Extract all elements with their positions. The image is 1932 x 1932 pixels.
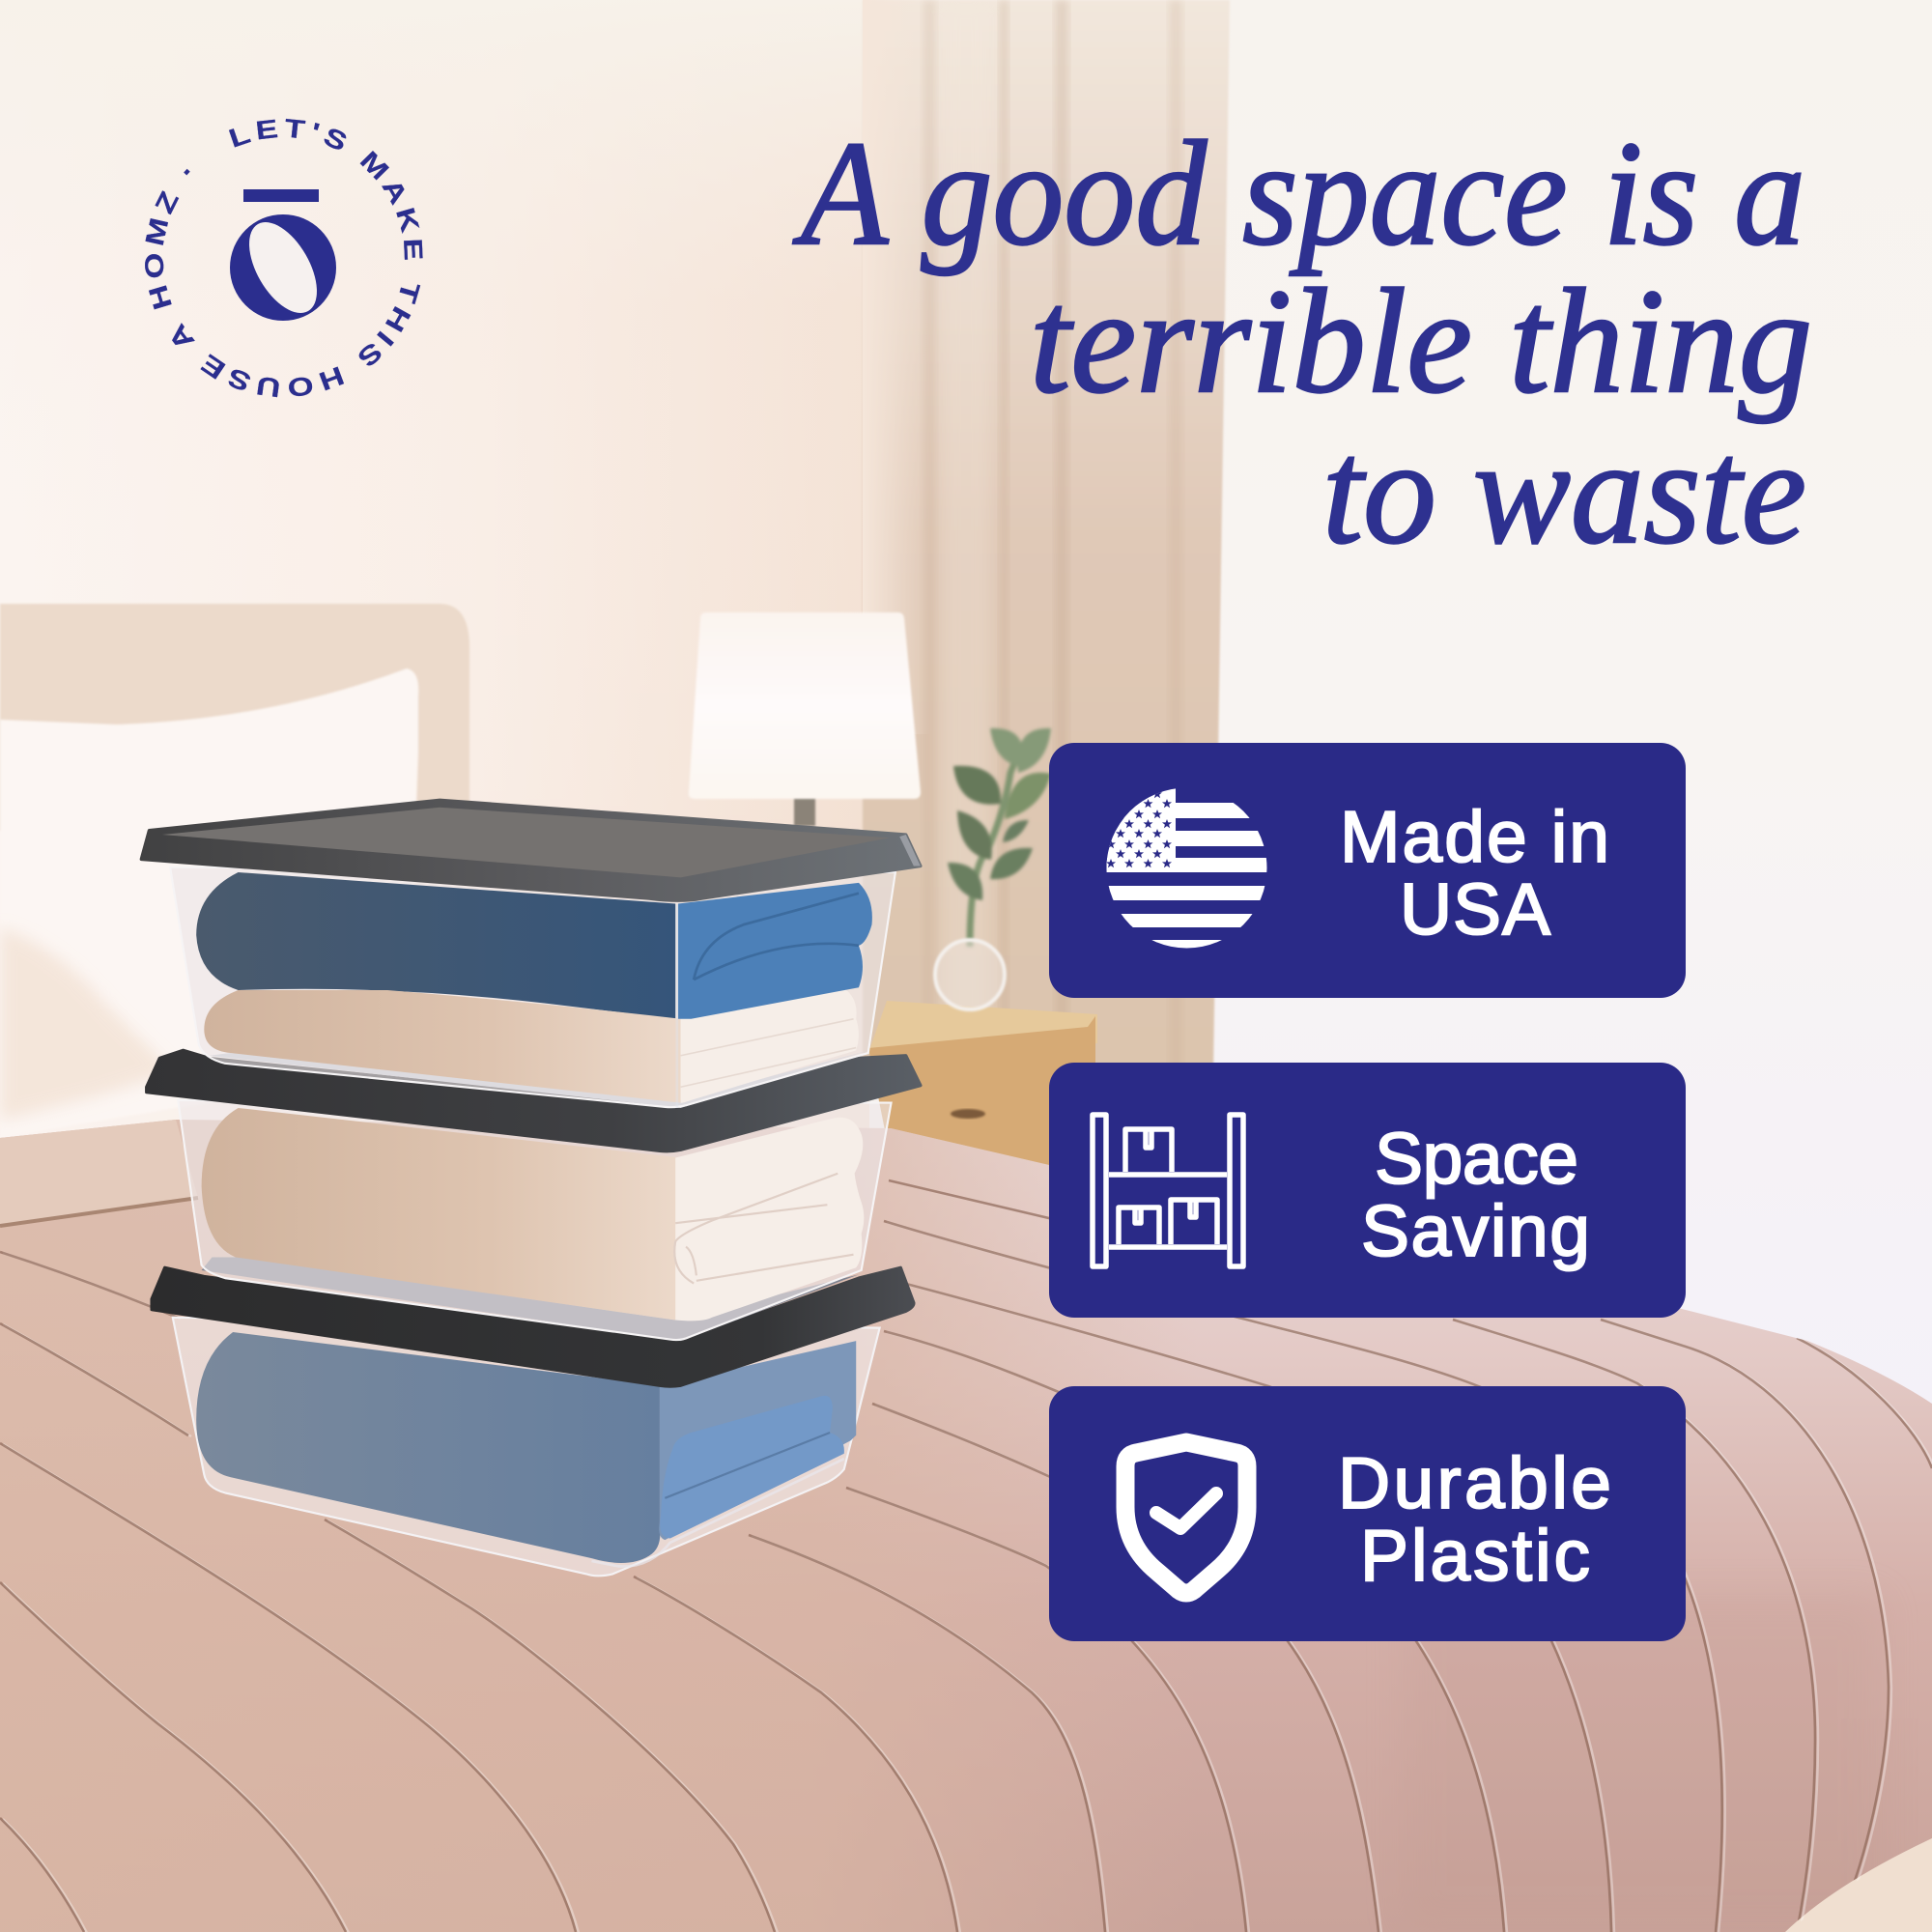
middle box lid — [147, 1050, 921, 1151]
headboard — [0, 604, 469, 831]
lid recess seen through middle box — [202, 1257, 859, 1341]
quilted bedspread — [0, 1111, 1932, 1932]
top wash over wall — [0, 0, 869, 869]
lamp — [689, 612, 921, 826]
middle box — [147, 1050, 921, 1340]
badge: space saving — [1049, 1063, 1686, 1318]
icon: shield with check — [1125, 1442, 1247, 1593]
plant in glass vase — [948, 728, 1051, 947]
stack of three storage boxes — [141, 800, 921, 1576]
circular tagline: LET'S MAKE THIS HOUSE A HOMZ · — [145, 118, 423, 398]
label: durable plastic: Durable — [1338, 1442, 1611, 1523]
label: made in USA: USA — [1400, 868, 1550, 950]
floor — [1642, 1642, 1932, 1932]
vase glass — [935, 940, 1005, 1009]
title — [792, 110, 1812, 575]
quilting seams — [0, 1180, 1932, 1932]
title: terrible thing — [1030, 258, 1812, 424]
pillow — [0, 668, 418, 1138]
label: durable plastic — [1338, 1442, 1611, 1596]
label: space saving: Space — [1375, 1118, 1578, 1199]
label: made in USA — [1340, 796, 1609, 950]
wall left of curtain — [0, 0, 869, 1208]
nightstand — [868, 1001, 1097, 1174]
label: space saving: Saving — [1361, 1190, 1590, 1271]
logo mark — [230, 189, 336, 325]
folded blanket edge at headboard — [0, 1120, 198, 1226]
quilting highlights — [3, 1222, 1932, 1932]
label: durable plastic: Plastic — [1360, 1515, 1590, 1596]
icon: American flag circle — [1101, 787, 1275, 950]
label: space saving — [1361, 1118, 1590, 1271]
badge: durable plastic — [1049, 1386, 1686, 1641]
bottom box lid — [152, 1267, 914, 1386]
curtain — [863, 0, 1230, 1072]
top box lid — [141, 800, 921, 900]
badge: made in USA — [1049, 743, 1686, 998]
wall right of curtain — [1198, 0, 1932, 1449]
bottom box — [152, 1257, 914, 1576]
title: A good space is a — [792, 110, 1805, 276]
label: made in USA: Made in — [1340, 796, 1609, 877]
icon: storage shelf with boxes — [1093, 1115, 1243, 1266]
top box — [141, 800, 921, 1108]
title: to waste — [1322, 409, 1806, 575]
recess of lid seen through top box — [210, 1050, 869, 1108]
logo badge — [145, 118, 423, 398]
